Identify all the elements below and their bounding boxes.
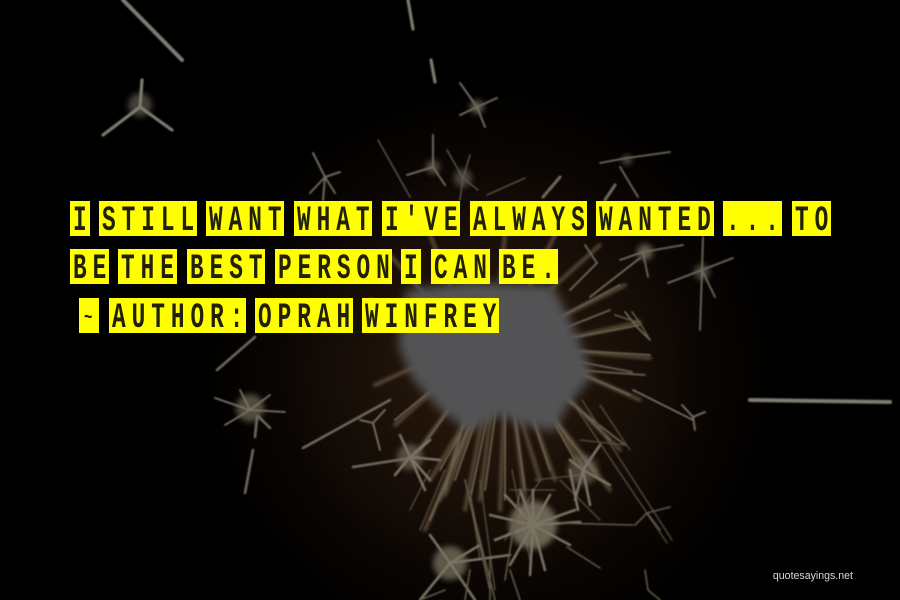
fuzzy rays around the core — [370, 235, 650, 530]
sparkler core — [398, 282, 593, 432]
tilde: ~ — [84, 307, 92, 330]
quote line 1 — [70, 201, 831, 236]
fine spark rays — [395, 285, 672, 590]
tilde — [79, 298, 99, 333]
spark glows — [128, 93, 710, 580]
quote line 2 — [70, 249, 558, 284]
watermark: quotesayings.net — [773, 570, 853, 582]
author line — [79, 298, 499, 333]
